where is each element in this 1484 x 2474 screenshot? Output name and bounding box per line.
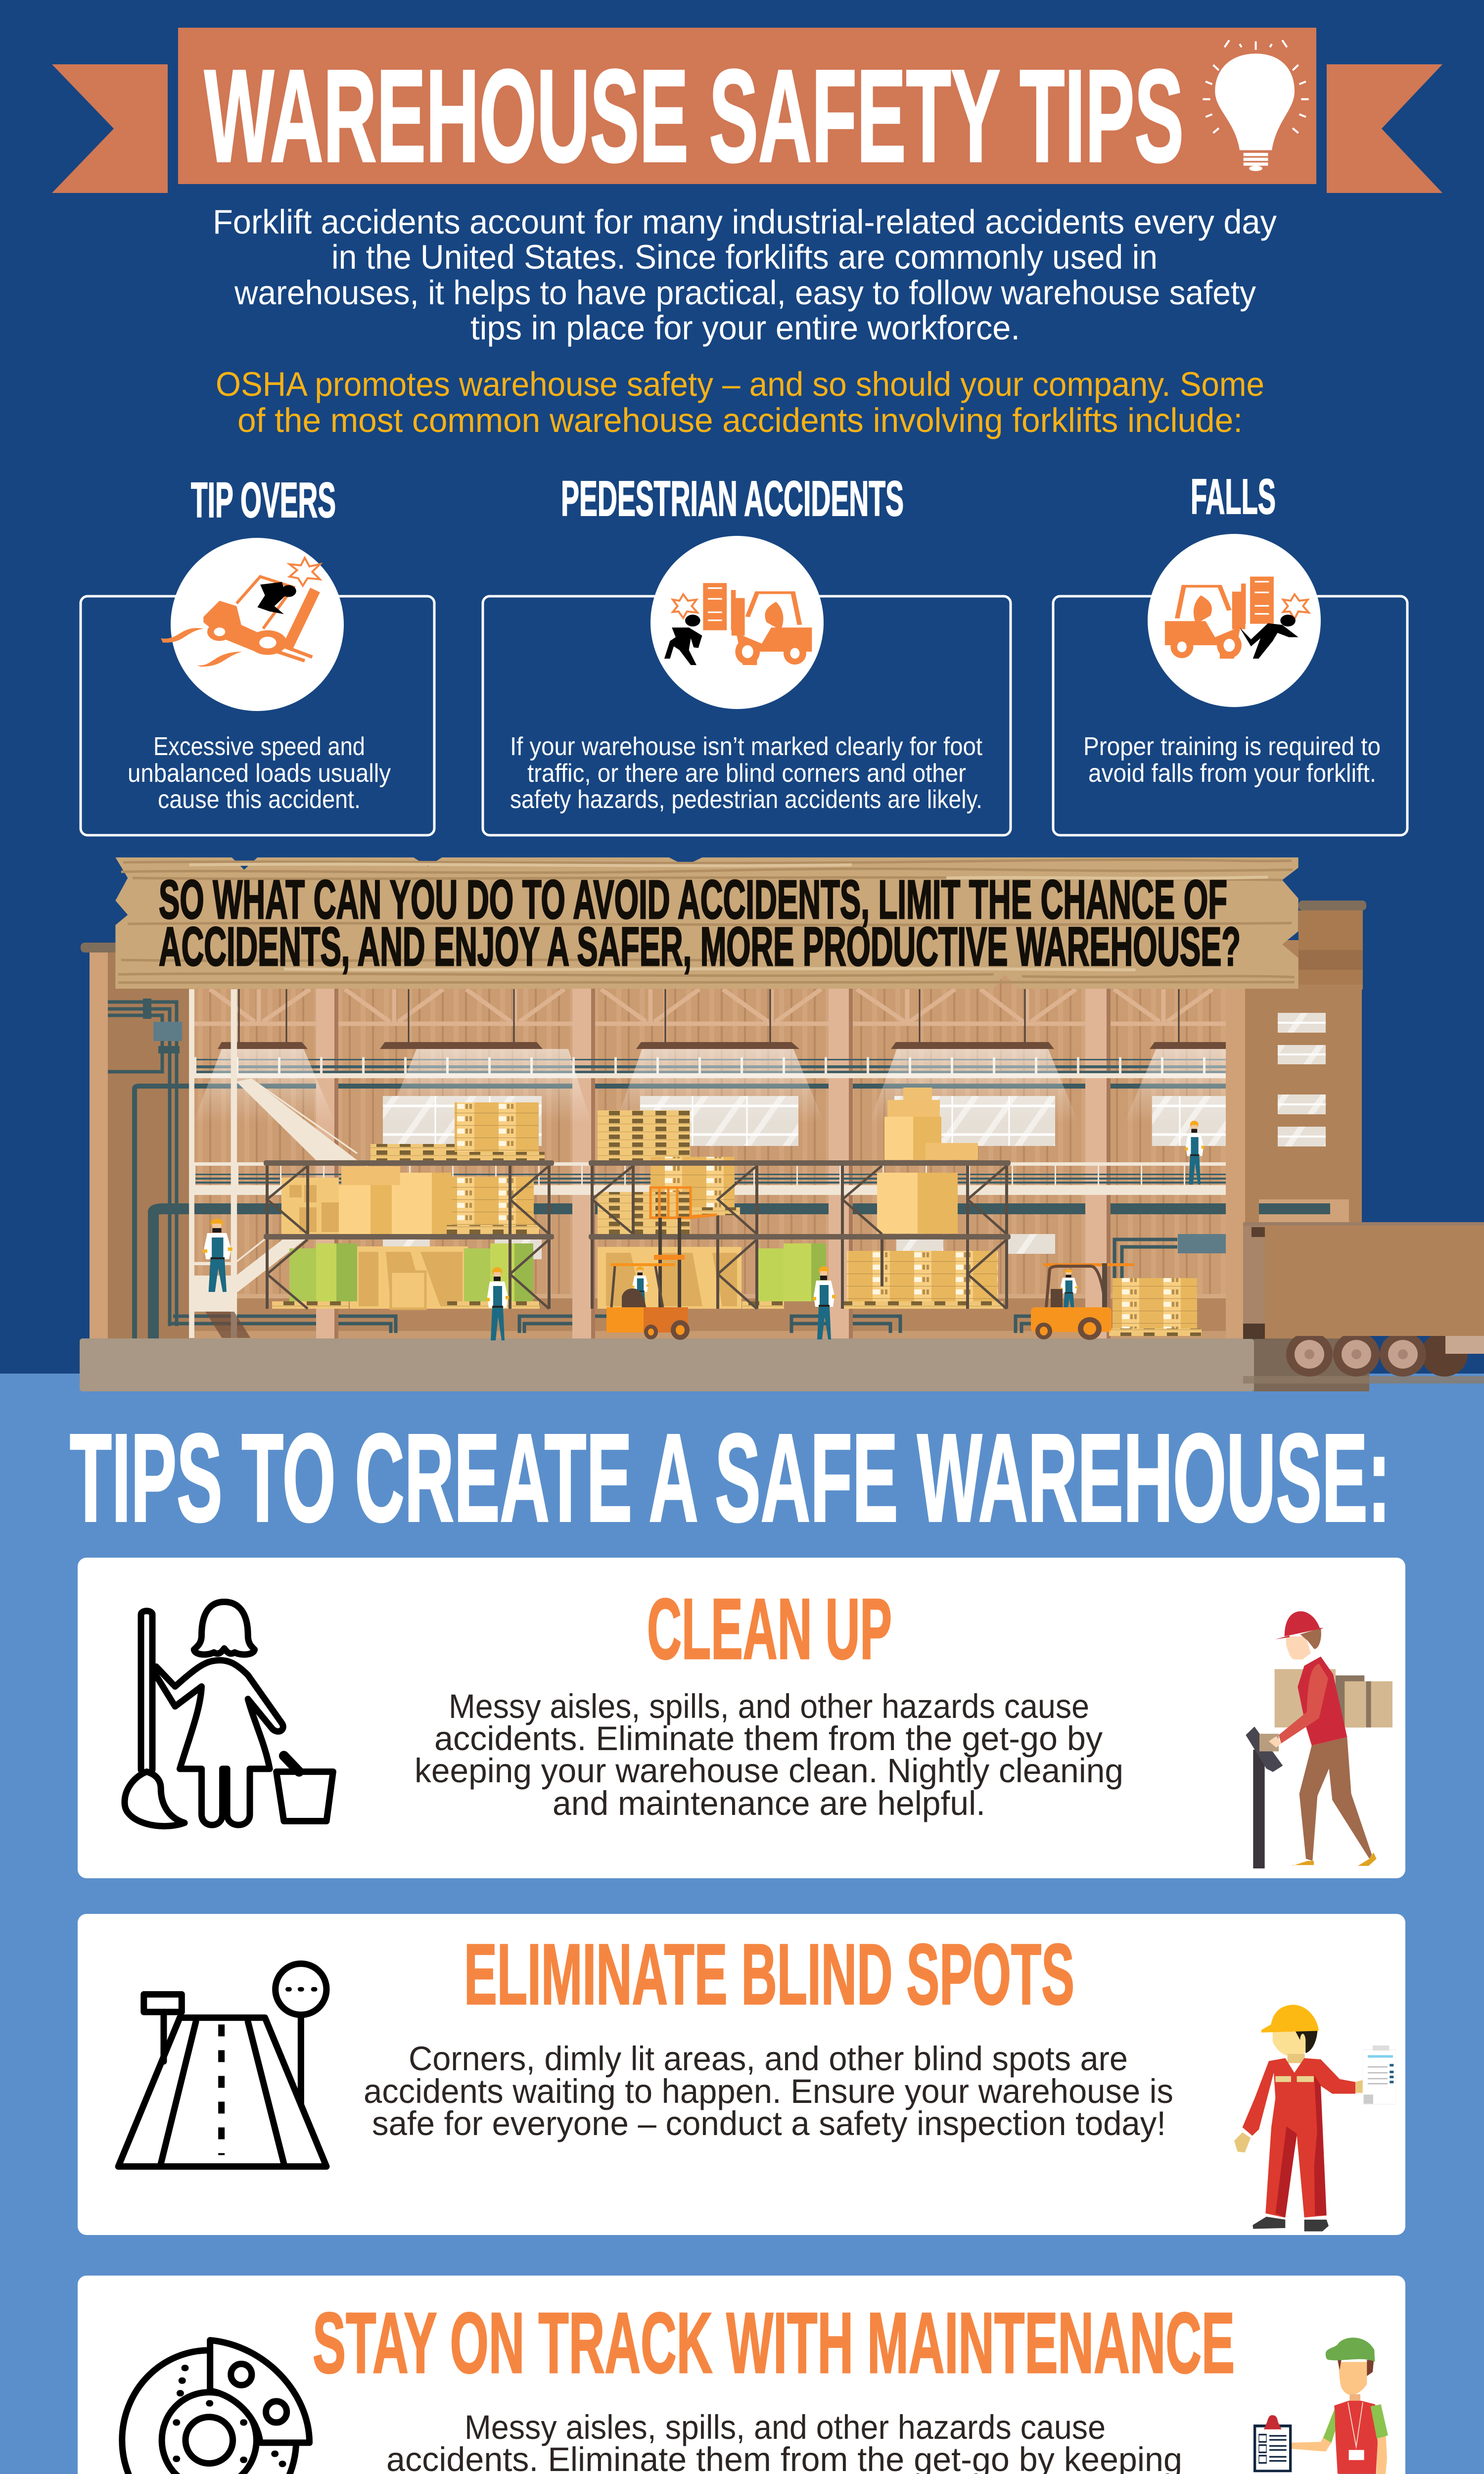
- forklift left: [606, 1188, 717, 1340]
- body text: [361, 2408, 1209, 2474]
- dark blue header background: [0, 0, 1484, 1374]
- workers: [203, 1121, 1205, 1340]
- worker: red shirt with boxes: [1246, 1611, 1392, 1868]
- warehouse illustration: [80, 901, 1484, 1391]
- intro text: warehouses, it helps to have practical, easy to follow warehouse safety: [234, 274, 1256, 312]
- body text: accidents. Eliminate them from the get-go by: [434, 1719, 1103, 1758]
- intro text: Forklift accidents account for many industrial-related accidents every day: [213, 203, 1277, 241]
- panel: tip overs: [81, 538, 434, 835]
- panel: tip overs: cause this accident.: [158, 785, 361, 814]
- intro text: in the United States. Since forklifts are commonly used in: [331, 238, 1158, 276]
- body text: Messy aisles, spills, and other hazards cause: [449, 1687, 1089, 1725]
- body text: [364, 2040, 1173, 2142]
- body text: safe for everyone – conduct a safety inspection today!: [372, 2104, 1166, 2142]
- body text: and maintenance are helpful.: [553, 1784, 985, 1822]
- wooden sign: [115, 857, 1298, 989]
- left tower: [90, 952, 189, 1338]
- interior wall: [189, 955, 1226, 1338]
- hanging lamps: [218, 989, 1226, 1049]
- icon: light bulb: [1203, 40, 1309, 171]
- intro text: tips in place for your entire workforce.: [470, 309, 1020, 347]
- OSHA yellow text: of the most common warehouse accidents involving forklifts include:: [237, 401, 1243, 439]
- icon: road with signs: [118, 1964, 326, 2166]
- lower wall bands: [189, 1294, 1226, 1338]
- staircase: [189, 989, 357, 1338]
- heading: pedestrian accidents: PEDESTRIAN ACCIDENTS: [561, 471, 904, 526]
- card: eliminate blind spots: [78, 1914, 1405, 2235]
- body text: [415, 1687, 1123, 1822]
- panel: pedestrian accidents: safety hazards, pedestrian accidents are likely.: [510, 785, 982, 814]
- ribbon left tail: [52, 64, 168, 193]
- floor dark extension: [1254, 1338, 1369, 1391]
- columns: [316, 989, 1111, 1338]
- tower top caps: [81, 901, 1366, 990]
- pipes: [108, 1002, 1226, 1338]
- heading: falls: FALLS: [1191, 469, 1276, 524]
- text: If your warehouse isn’t marked clearly for foot: [510, 732, 982, 761]
- panel: falls: [1053, 534, 1407, 835]
- goods: green drums: [289, 1243, 826, 1301]
- OSHA yellow text: [216, 365, 1264, 439]
- OSHA yellow text: OSHA promotes warehouse safety – and so should your company. Some: [216, 365, 1264, 403]
- roof truss: [189, 989, 1226, 1024]
- electrical boxes: [143, 999, 1226, 1253]
- icon circle: tip over forklift: [161, 538, 344, 711]
- body text: Messy aisles, spills, and other hazards cause: [464, 2408, 1106, 2446]
- intro text: [213, 203, 1277, 347]
- light blue tips background: [0, 1374, 1484, 2474]
- forklift right: [1031, 1263, 1202, 1340]
- floor: [80, 1338, 1254, 1391]
- heading: tip overs: TIP OVERS: [191, 473, 336, 528]
- upper catwalk: [189, 1059, 1226, 1078]
- panel: pedestrian accidents: [483, 536, 1011, 835]
- title banner: [52, 28, 1442, 193]
- goods: boxes and pallets: [272, 1088, 1003, 1309]
- panel: pedestrian accidents: traffic, or there are blind corners and other: [527, 759, 966, 788]
- body text: Corners, dimly lit areas, and other blind spots are: [409, 2040, 1128, 2078]
- icon: woman with mop: [125, 1602, 333, 1826]
- heading: CLEAN UP: [647, 1580, 892, 1677]
- worker: green cap with clipboard: [1253, 2337, 1393, 2474]
- goods: lower rack crates: [281, 1178, 742, 1309]
- text: Proper training is required to: [1083, 732, 1381, 761]
- light cones: [193, 1049, 1226, 1124]
- body text: keeping your warehouse clean. Nightly cleaning: [415, 1752, 1123, 1790]
- panel: tip overs: unbalanced loads usually: [128, 759, 391, 788]
- banner panel: [178, 28, 1316, 184]
- card: clean up: [78, 1558, 1405, 1878]
- icon circle: forklift and pedestrian: [650, 536, 824, 709]
- ribbon right tail: [1327, 64, 1442, 193]
- panel: falls: avoid falls from your forklift.: [1088, 759, 1376, 788]
- worker: red jumpsuit with checklist: [1234, 2005, 1396, 2232]
- icon circle: falling from forklift: [1148, 534, 1321, 707]
- text: Excessive speed and: [153, 732, 365, 761]
- right tower: [1226, 985, 1362, 1338]
- large windows: [383, 1096, 1226, 1259]
- lower catwalk: [189, 1162, 1226, 1195]
- truck: [1243, 1222, 1484, 1383]
- wood plank: [115, 857, 1298, 989]
- racking: [264, 1160, 1011, 1309]
- card: stay on track with maintenance: [78, 2276, 1405, 2474]
- icon: brake disc: [122, 2340, 310, 2474]
- body text: accidents waiting to happen. Ensure your warehouse is: [364, 2072, 1173, 2110]
